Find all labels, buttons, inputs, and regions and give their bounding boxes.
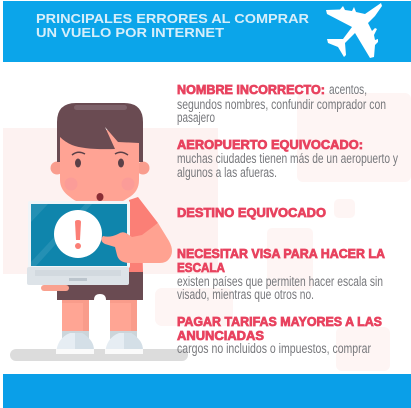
title: UN VUELO POR INTERNET [36,25,224,40]
exclamation mark [75,220,81,249]
shoes [56,331,143,354]
laptop keyboard [27,267,129,285]
item: necesitar visa: NECESITAR VISA PARA HACER LA [177,247,385,261]
item: nombre incorrecto: acentos, [329,82,367,97]
ground shadow [10,349,188,361]
character [10,103,188,361]
title: PRINCIPALES ERRORES AL COMPRAR [36,11,310,26]
eyebrows [72,152,128,155]
shorts [57,271,143,300]
head [50,103,150,204]
item: aeropuerto equivocado: AEROPUERTO EQUIVOCADO: [177,138,363,152]
legs [62,298,137,336]
face [60,130,139,204]
hair highlight [74,105,127,110]
item: necesitar visa: ESCALA [177,261,225,275]
item: necesitar visa: visado, mientras que otros no. [177,287,314,302]
laptop screen [31,204,127,266]
header banner [3,1,411,62]
item: pagar tarifas: PAGAR TARIFAS MAYORES A LAS [177,315,382,329]
left hand [41,285,69,291]
background pale shapes [3,93,411,371]
torso and sleeve [128,197,158,272]
eyes [75,158,124,168]
item: pagar tarifas [177,315,382,356]
title [36,11,310,40]
pointing hand [101,223,172,263]
cheeks [64,178,78,190]
item: aeropuerto equivocado: algunos a las afueras. [177,165,277,180]
item: nombre incorrecto [177,82,386,125]
mouth [96,193,104,201]
hair [57,103,143,162]
icon: airplane [326,3,382,58]
item: nombre incorrecto: pasajero [177,110,215,125]
item: pagar tarifas: ANUNCIADAS [177,329,264,343]
laptop lid [28,201,130,268]
item: aeropuerto equivocado [177,138,398,180]
item: necesitar visa [177,247,385,302]
item: nombre incorrecto: NOMBRE INCORRECTO: [177,83,325,97]
ears [50,162,64,174]
alert circle [54,210,102,258]
footer banner [3,374,411,408]
laptop [27,201,130,285]
item: destino equivocado: DESTINO EQUIVOCADO [177,206,326,220]
